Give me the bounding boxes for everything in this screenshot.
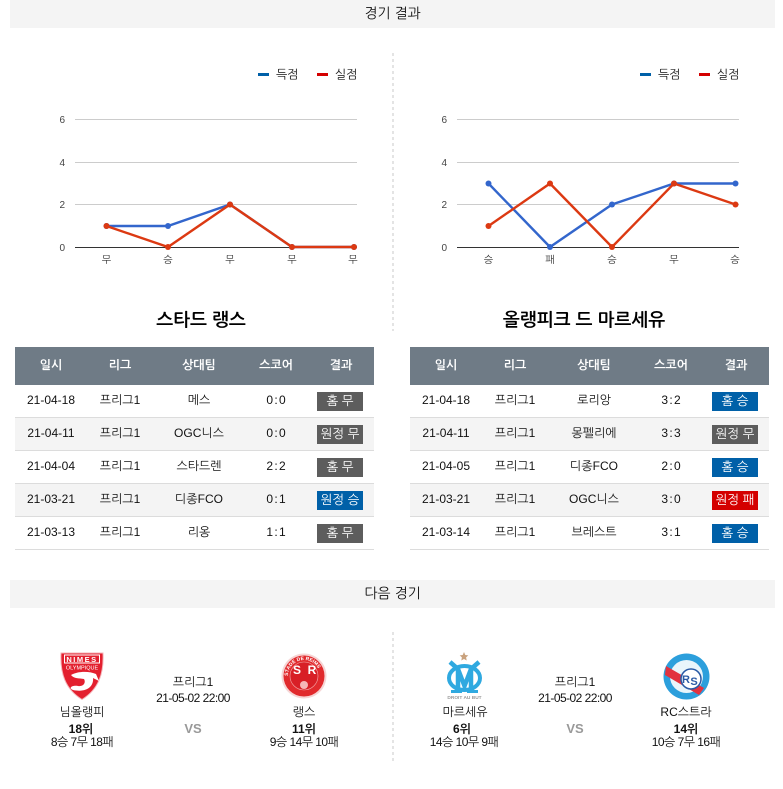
- row 4: 0 : 1: [266, 492, 286, 506]
- table header: 결과: [330, 358, 352, 372]
- goals scored line: [104, 202, 357, 250]
- row 3: 홈 승: [722, 460, 748, 474]
- team: Nimes: [51, 705, 113, 749]
- team title: Marseille: 올랭피크 드 마르세유: [503, 310, 665, 330]
- team: Nimes: 18위: [69, 722, 93, 736]
- row 5: [410, 517, 769, 550]
- team: Marseille: [430, 705, 498, 749]
- line chart: Reims results: [59, 68, 358, 266]
- legend: goals for and against: [640, 68, 740, 82]
- row 3: [410, 451, 769, 484]
- row 5: 3 : 1: [661, 525, 681, 539]
- row 2: 0 : 0: [266, 426, 286, 440]
- row 4: 원정 패: [716, 493, 754, 507]
- match info: Nimes vs Reims: [156, 675, 230, 736]
- team: Marseille: 14승 10무 9패: [430, 735, 498, 749]
- row 2: 21-04-11: [27, 426, 75, 440]
- row 4: 디종FCO: [175, 492, 223, 506]
- row 1: 프리그1: [100, 393, 140, 407]
- row 3: 21-04-04: [27, 459, 75, 473]
- match info: Marseille vs Strasbourg: [538, 675, 612, 736]
- x axis labels: 무: [287, 255, 297, 266]
- row 2: [410, 418, 769, 451]
- row 2: 21-04-11: [422, 426, 470, 440]
- team: Strasbourg: 14위: [674, 722, 698, 736]
- row 4: OGC니스: [569, 492, 619, 506]
- row 5: 홈 승: [722, 526, 748, 540]
- table header: [410, 347, 769, 385]
- table header: 스코어: [654, 358, 688, 372]
- y axis and gridlines: 2: [441, 200, 447, 211]
- row 1: 프리그1: [495, 393, 535, 407]
- icon: Nimes crest: NIMES: [66, 655, 98, 664]
- icon: Nimes crest: OLYMPIQUE: [66, 666, 98, 672]
- row 3: 2 : 2: [266, 459, 286, 473]
- row 5: 1 : 1: [266, 525, 286, 539]
- y axis and gridlines: 0: [441, 243, 447, 254]
- y axis and gridlines: [441, 115, 739, 254]
- icon: Reims crest: STADE DE REIMS: [284, 656, 321, 676]
- row 1: 0 : 0: [266, 393, 286, 407]
- y axis and gridlines: 6: [441, 115, 447, 126]
- table header: 상대팀: [577, 358, 611, 372]
- goals conceded line: [104, 202, 357, 250]
- row 2: 프리그1: [100, 426, 140, 440]
- row 4: 3 : 0: [661, 492, 681, 506]
- row 5: 브레스트: [571, 525, 617, 539]
- icon: Reims crest: [282, 654, 326, 698]
- row 5: 21-03-14: [422, 525, 470, 539]
- row 1: 홈 승: [722, 394, 748, 408]
- icon: Strasbourg crest: R: [682, 674, 690, 686]
- row 3: 프리그1: [100, 459, 140, 473]
- y axis and gridlines: [59, 115, 357, 254]
- table header: 일시: [435, 358, 457, 372]
- row 4: 21-03-21: [27, 492, 75, 506]
- row 5: 프리그1: [100, 525, 140, 539]
- team title: Reims: 스타드 랭스: [156, 310, 246, 330]
- team: Reims: 9승 14무 10패: [270, 735, 338, 749]
- heading band: next match: 다음 경기: [364, 585, 421, 601]
- row 2: 원정 무: [321, 427, 359, 441]
- heading band: match results: 경기 결과: [364, 5, 421, 21]
- line chart: Marseille results: [441, 68, 740, 266]
- team: Reims: [270, 705, 338, 749]
- goals scored line: [486, 180, 738, 250]
- y axis and gridlines: 4: [59, 158, 65, 169]
- row 2: [15, 418, 374, 451]
- x axis labels: 무: [348, 255, 358, 266]
- row 1: [15, 385, 374, 418]
- team: Nimes: 님올랭피: [59, 705, 105, 719]
- legend: goals for and against: 실점: [335, 68, 358, 82]
- row 5: 리옹: [188, 525, 210, 539]
- x axis labels: 승: [163, 254, 173, 266]
- row 4: 프리그1: [495, 492, 535, 506]
- row 3: 디종FCO: [570, 459, 618, 473]
- icon: Strasbourg crest: S: [690, 676, 698, 688]
- row 3: 프리그1: [495, 459, 535, 473]
- table header: 스코어: [259, 358, 293, 372]
- x axis labels: 무: [102, 255, 112, 266]
- x axis labels: [102, 254, 358, 266]
- team: Strasbourg: 10승 7무 16패: [652, 735, 720, 749]
- row 2: 프리그1: [495, 426, 535, 440]
- row 2: 3 : 3: [661, 426, 681, 440]
- table header: 리그: [109, 358, 131, 372]
- x axis labels: 패: [545, 254, 555, 266]
- goals conceded line: [486, 180, 738, 250]
- table header: 상대팀: [182, 358, 216, 372]
- icon: Marseille crest: [447, 652, 482, 700]
- team: Strasbourg: [652, 705, 720, 749]
- row 1: 21-04-18: [422, 393, 470, 407]
- row 5: [15, 517, 374, 550]
- row 3: 홈 무: [326, 460, 353, 474]
- row 1: 메스: [188, 393, 210, 407]
- match info: Nimes vs Reims: 프리그1: [173, 675, 213, 689]
- row 4: [15, 484, 374, 517]
- y axis and gridlines: 2: [59, 200, 65, 211]
- row 5: 프리그1: [495, 525, 535, 539]
- team: Marseille: 6위: [453, 722, 471, 736]
- match info: Marseille vs Strasbourg: VS: [566, 721, 584, 736]
- table: Reims recent matches: [15, 347, 374, 550]
- team: Strasbourg: RC스트라: [660, 705, 712, 719]
- x axis labels: 무: [669, 255, 679, 266]
- x axis labels: 승: [607, 254, 617, 266]
- row 2: OGC니스: [174, 426, 224, 440]
- y axis and gridlines: 4: [441, 158, 447, 169]
- legend: goals for and against: [258, 68, 358, 82]
- row 1: 21-04-18: [27, 393, 75, 407]
- icon: Reims crest: S: [293, 663, 301, 677]
- match info: Nimes vs Reims: VS: [184, 721, 202, 736]
- table: Marseille recent matches: [410, 347, 769, 550]
- row 5: 21-03-13: [27, 525, 75, 539]
- icon: Nimes crest: [60, 652, 104, 700]
- icon: Strasbourg crest: [664, 654, 710, 700]
- row 2: 원정 무: [716, 427, 754, 441]
- row 1: 로리앙: [577, 393, 611, 407]
- row 3: 스타드렌: [176, 459, 222, 473]
- match info: Marseille vs Strasbourg: 21-05-02 22:00: [538, 691, 612, 705]
- team: Reims: 11위: [292, 722, 316, 736]
- legend: goals for and against: 득점: [276, 68, 299, 82]
- row 4: 원정 승: [321, 493, 359, 507]
- row 3: [15, 451, 374, 484]
- row 2: 몽펠리에: [571, 426, 617, 440]
- x axis labels: [484, 254, 740, 266]
- row 5: 홈 무: [326, 526, 353, 540]
- row 3: 21-04-05: [422, 459, 470, 473]
- team: Nimes: 8승 7무 18패: [51, 735, 113, 749]
- x axis labels: 승: [484, 254, 494, 266]
- heading band: next match: [10, 580, 775, 608]
- icon: Reims crest: R: [308, 663, 317, 677]
- row 1: 홈 무: [326, 394, 353, 408]
- match info: Nimes vs Reims: 21-05-02 22:00: [156, 691, 230, 705]
- y axis and gridlines: 0: [59, 243, 65, 254]
- row 4: 21-03-21: [422, 492, 470, 506]
- heading band: match results: [10, 0, 775, 28]
- x axis labels: 무: [225, 255, 235, 266]
- row 4: [410, 484, 769, 517]
- legend: goals for and against: 실점: [717, 68, 740, 82]
- table header: [15, 347, 374, 385]
- row 3: 2 : 0: [661, 459, 681, 473]
- row 1: 3 : 2: [661, 393, 681, 407]
- team: Reims: 랭스: [293, 705, 315, 719]
- row 1: [410, 385, 769, 418]
- legend: goals for and against: 득점: [658, 68, 681, 82]
- match info: Marseille vs Strasbourg: 프리그1: [555, 675, 595, 689]
- y axis and gridlines: 6: [59, 115, 65, 126]
- x axis labels: 승: [730, 254, 740, 266]
- table header: 결과: [725, 358, 747, 372]
- table header: 일시: [40, 358, 62, 372]
- row 4: 프리그1: [100, 492, 140, 506]
- team: Marseille: 마르세유: [442, 705, 488, 719]
- table header: 리그: [504, 358, 526, 372]
